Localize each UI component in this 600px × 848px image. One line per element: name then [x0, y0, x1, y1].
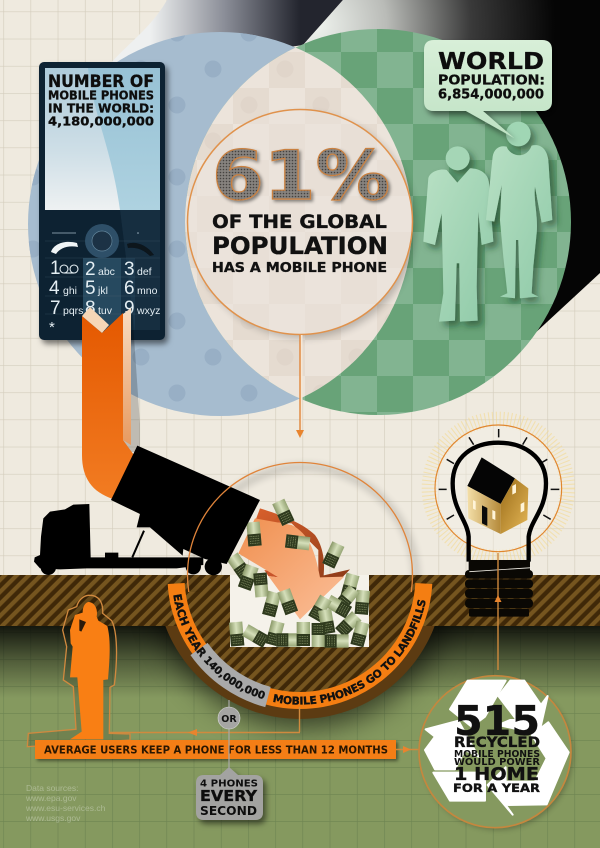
curved label band: EACH YEAR [173, 594, 206, 658]
landfill circle outline [186, 462, 414, 592]
connector line to man [110, 707, 300, 736]
recycling text [453, 697, 540, 795]
bubble text: POPULATION: [438, 72, 545, 88]
arrow: circle to landfill [296, 335, 304, 438]
band number: 140,000,000 [204, 656, 265, 699]
headline text [212, 212, 388, 276]
bulb rays [429, 419, 567, 557]
grey tag: 4 phones every second [196, 767, 263, 820]
man with phone silhouette [27, 595, 130, 747]
band text remainder: MOBILE PHONES GO TO LANDFILLS [273, 600, 426, 705]
peach landfill arrow [238, 508, 350, 619]
phone keypad: * [49, 319, 55, 336]
data sources: www.usgs.gov [25, 813, 81, 823]
ground layer with landfill bowl [0, 575, 600, 719]
phone keypad: pqrs [63, 305, 83, 317]
bulb tick marks [439, 429, 559, 519]
phone keypad: 5 [85, 278, 96, 299]
headline text: OF THE GLOBAL [212, 212, 387, 233]
data sources: www.epa.gov [25, 793, 77, 803]
recycling text: WOULD POWER [454, 757, 540, 768]
phone handset [39, 62, 165, 340]
61 percent circle [188, 110, 416, 338]
phone keypad: wxyz [136, 305, 160, 317]
grey tag: 4 phones every second: EVERY [200, 787, 258, 805]
grey connector [228, 700, 230, 778]
data sources: www.esu-services.ch [25, 803, 106, 813]
phone screen [45, 68, 160, 210]
phone screen text: NUMBER OF [48, 72, 154, 92]
phone keypad: 6 [124, 278, 135, 299]
phone keypad: 1 [50, 258, 61, 279]
phone keypad: abc [98, 266, 115, 278]
curved label band [168, 583, 432, 709]
phone keypad [45, 210, 160, 336]
data sources [25, 783, 106, 823]
underground panel [0, 626, 600, 848]
phone keypad: ghi [63, 285, 77, 297]
band path and text [172, 584, 428, 705]
house side wall [501, 478, 528, 534]
OR badge: OR [221, 714, 237, 725]
phone keypad: tuv [98, 305, 113, 317]
venn overlap lens [185, 48, 411, 398]
phone keypad: 7 [50, 298, 61, 319]
phone keypad: 9 [124, 298, 135, 319]
bubble text [438, 47, 545, 102]
orange pipe arrow from phone to truck [82, 307, 145, 499]
speech bubble: world population [424, 40, 552, 138]
phone keypad: def [137, 266, 152, 278]
man phone [79, 619, 86, 632]
phone keypad: mno [137, 285, 158, 297]
arrow: recycling to bulb [494, 553, 502, 670]
61 percent figure: 61% [212, 137, 390, 216]
headline text: POPULATION [212, 232, 388, 260]
arrow: bar to recycling [396, 746, 420, 753]
phone keypad: 4 [49, 278, 60, 299]
house door and windows [473, 484, 524, 526]
data sources: Data sources: [26, 783, 78, 793]
phone keypad: 3 [124, 259, 135, 280]
grey tag: 4 phones every second: 4 PHONES [200, 778, 258, 790]
grey number band [199, 649, 268, 697]
bubble text: WORLD [438, 47, 544, 75]
bulb ring [435, 425, 562, 552]
recycling arrows [425, 681, 569, 815]
phone screen text [48, 72, 154, 128]
venn circle: population (green) [185, 29, 571, 415]
grey tag: 4 phones every second: SECOND [200, 804, 257, 818]
phone screen text: 4,180,000,000 [48, 114, 154, 128]
man body [70, 602, 110, 739]
discarded phones pile [227, 499, 370, 648]
OR badge [218, 707, 240, 729]
phone screen text: IN THE WORLD: [48, 102, 154, 116]
recycling text: FOR A YEAR [453, 781, 540, 795]
house roof [467, 457, 515, 504]
figure: man [423, 146, 493, 322]
circle shadow [186, 461, 422, 592]
truck cab and chassis [34, 504, 222, 575]
phone keypad: jkl [97, 285, 108, 297]
phone keypad: 8 [85, 298, 96, 319]
venn circle: phones (blue) [28, 32, 412, 416]
light bulb with house [429, 419, 567, 617]
truck dump bed [111, 446, 260, 564]
dump truck [34, 446, 260, 575]
recycling text: 515 [454, 697, 540, 745]
bulb glass outline [453, 443, 546, 562]
headline text: HAS A MOBILE PHONE [212, 260, 387, 276]
recycling text: 1 HOME [454, 764, 539, 785]
phone keypad: 2 [85, 259, 96, 280]
orange bar: keep a phone: AVERAGE USERS KEEP A PHONE FOR LESS THAN 12 MONTHS [44, 744, 388, 756]
recycling text: MOBILE PHONES [454, 749, 540, 760]
recycling circle [419, 676, 573, 830]
house front wall [467, 486, 501, 534]
figure: woman [486, 122, 552, 298]
orange bar: keep a phone [35, 740, 396, 759]
phone screen text: MOBILE PHONES [48, 88, 154, 102]
bubble text: 6,854,000,000 [438, 88, 544, 102]
dark background sweep [105, 0, 600, 335]
landfill hole [230, 575, 369, 647]
recycling text: RECYCLED [454, 735, 540, 751]
bulb screw base [465, 560, 533, 617]
